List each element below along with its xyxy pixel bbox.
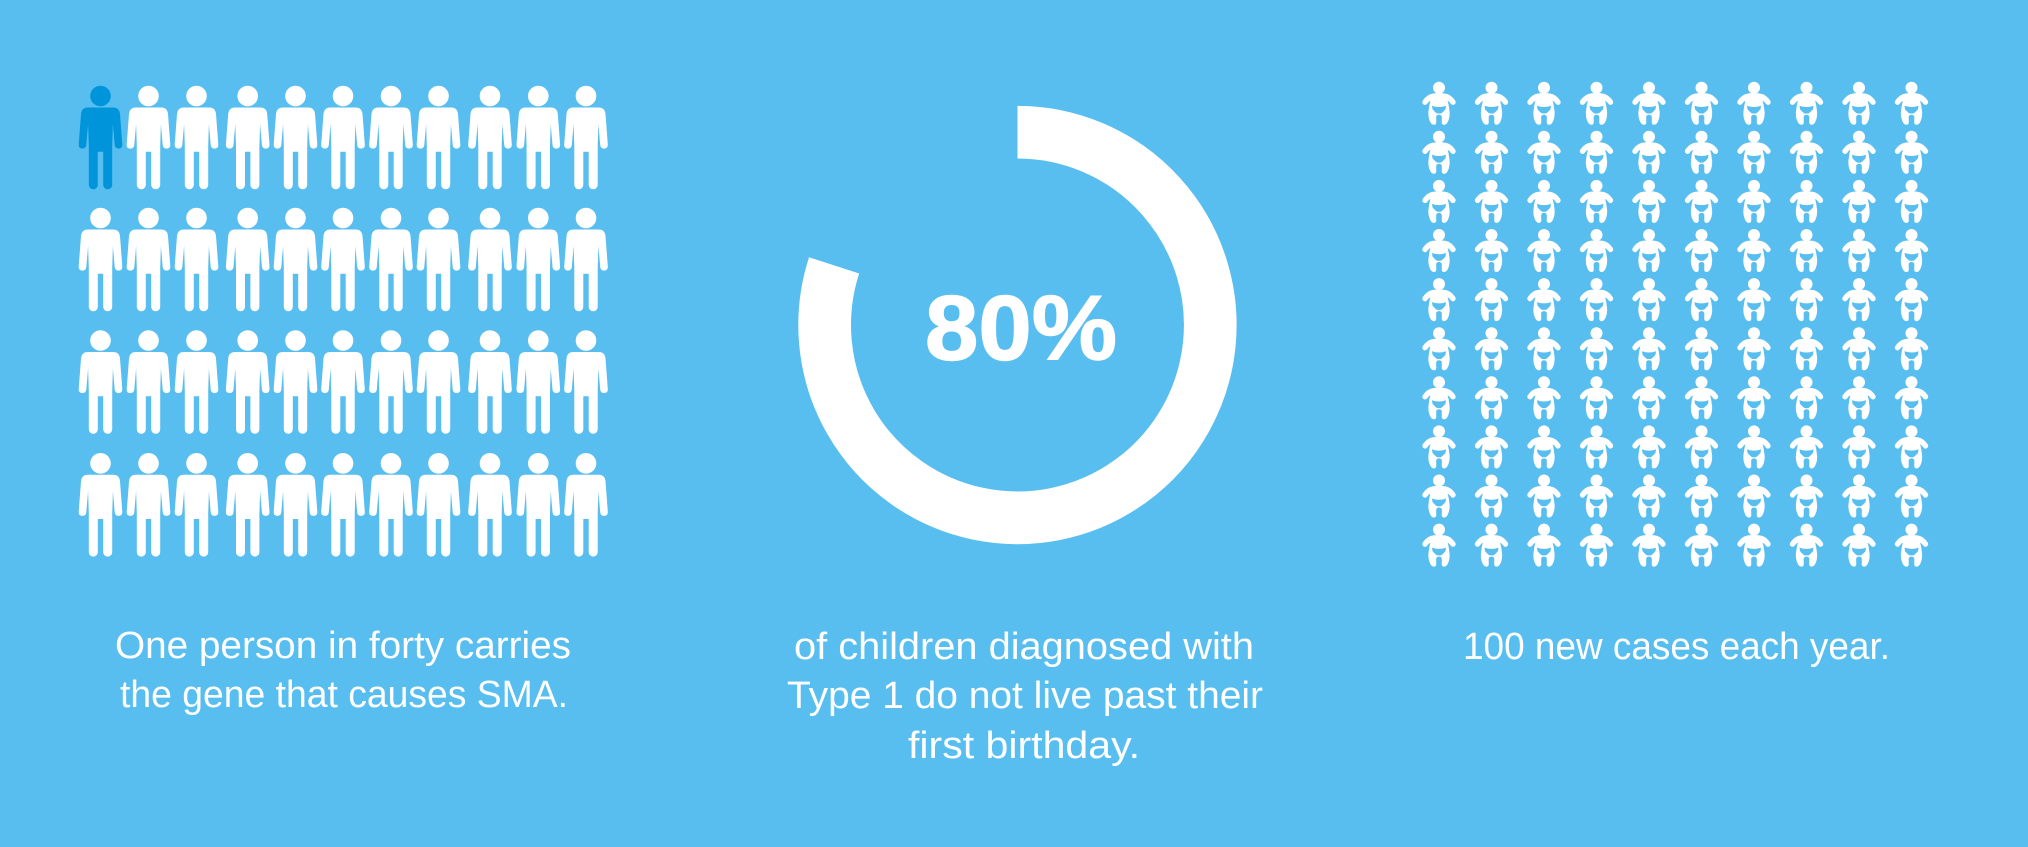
panel: new cases [1422,82,1928,668]
icon: highlighted person [79,86,122,189]
icon grid: one hundred babies [1422,82,1928,568]
donut chart: 80 percent [825,132,1210,518]
caption: mortality: Type 1 do not live past their [787,675,1263,717]
panel: mortality [787,132,1263,767]
panel: carriers [79,86,608,716]
caption: new cases: 100 new cases each year. [1463,626,1890,668]
caption: mortality: of children diagnosed with [794,626,1254,668]
stat: 80%: 80% [925,278,1117,380]
caption: carriers: the gene that causes SMA. [120,674,568,716]
caption: mortality [787,626,1263,767]
caption: carriers [115,625,571,716]
caption: mortality: first birthday. [908,725,1140,767]
icon grid: forty people [79,86,608,557]
caption: carriers: One person in forty carries [115,625,571,667]
